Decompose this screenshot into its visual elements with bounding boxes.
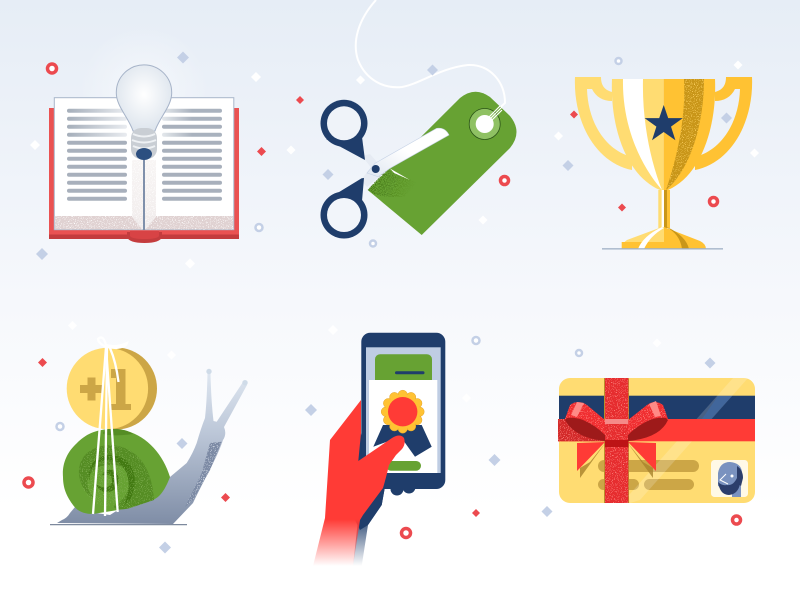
- panel: snail with coin: [50, 337, 248, 525]
- decorative blue diamonds: [36, 52, 732, 554]
- book pages: [54, 98, 234, 230]
- trophy handles: [575, 77, 752, 170]
- book cover: [49, 108, 239, 243]
- coin: [67, 348, 157, 430]
- ribbon around coin and shell: [93, 337, 127, 516]
- green button: [386, 461, 421, 471]
- dark forearm and fingers: [353, 433, 416, 566]
- panel: phone in hand: [313, 333, 445, 566]
- text pills: [598, 460, 699, 490]
- snail body texture: [185, 442, 222, 507]
- tag texture: [368, 168, 418, 197]
- snail body: [57, 372, 247, 524]
- tentacle tips: [206, 369, 248, 385]
- decorative red diamonds: [38, 96, 626, 517]
- panel: trophy: [575, 77, 752, 250]
- scissors: [320, 100, 449, 238]
- card sheen: [629, 378, 748, 503]
- panel: book and light bulb: [49, 25, 239, 243]
- bow tail shadows: [580, 442, 653, 478]
- tag eyelet: [469, 106, 502, 140]
- panel: scissors cutting tag: [320, 0, 516, 238]
- phone: [361, 333, 445, 489]
- trophy stem and base: [602, 190, 723, 250]
- green card on screen: [375, 354, 432, 394]
- decorative white diamonds: [30, 60, 759, 402]
- icon: light bulb: [116, 65, 172, 160]
- bow tails: [577, 442, 656, 471]
- white certificate: [369, 380, 437, 473]
- book spine: [143, 158, 145, 230]
- price tag: [368, 92, 516, 235]
- navy stripe: [559, 396, 755, 419]
- bow loops: [565, 401, 668, 447]
- ground line: [50, 524, 187, 525]
- right page text lines: [162, 109, 222, 201]
- snail shell: [63, 429, 170, 514]
- icon: star: [645, 105, 683, 140]
- portrait photo: [711, 460, 748, 497]
- horizontal red ribbon: [558, 419, 755, 441]
- hand: [313, 400, 405, 566]
- vertical red ribbon: [604, 378, 629, 503]
- string: [356, 0, 505, 117]
- decorative red rings: [24, 64, 740, 538]
- panel: gift card: [558, 378, 755, 503]
- card: [559, 378, 755, 503]
- decorative blue rings: [56, 58, 622, 430]
- icon: rosette: [381, 390, 424, 433]
- trophy bowl: [612, 79, 715, 190]
- icon: award ribbon: [373, 425, 432, 457]
- left page text lines: [67, 109, 127, 201]
